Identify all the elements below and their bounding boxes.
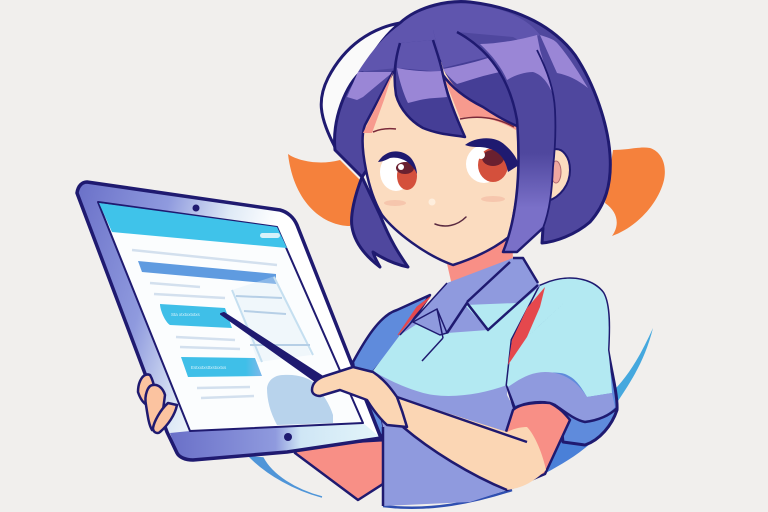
text lines	[132, 250, 277, 398]
blue arc right	[612, 328, 653, 404]
collar	[400, 258, 540, 361]
arm back pink	[295, 440, 386, 500]
forearm	[397, 397, 546, 490]
orange shape left	[288, 154, 360, 226]
front hair	[395, 30, 555, 252]
tablet	[77, 182, 381, 460]
tablet bottom bezel	[170, 423, 381, 460]
right lock	[457, 32, 555, 252]
glass reflection	[267, 375, 333, 425]
button two	[181, 357, 262, 377]
header pill	[260, 233, 280, 238]
section two line	[443, 75, 517, 126]
red strap left	[398, 297, 430, 335]
forehead shadow	[363, 72, 517, 133]
shirt outline	[382, 427, 384, 506]
lock outlines	[457, 32, 543, 252]
stylus	[221, 313, 323, 383]
nose	[428, 198, 436, 206]
blue arc bottom	[383, 490, 512, 508]
blush	[384, 200, 406, 206]
camera bottom	[284, 433, 292, 441]
hair back	[335, 2, 610, 243]
central bang	[395, 40, 465, 137]
hand	[312, 367, 407, 427]
back shoulder blue	[353, 295, 430, 440]
sleeve right	[507, 279, 617, 445]
orange shape right	[605, 147, 665, 236]
sleeve crease	[527, 302, 565, 337]
camera top	[192, 204, 200, 212]
button two: Estxxtxsttxstxxtxs	[191, 365, 227, 370]
right eye	[465, 138, 519, 183]
bar blue	[138, 261, 276, 284]
tablet screen	[98, 202, 363, 431]
button one: Sta xtxtxxtxtxs	[171, 312, 201, 317]
hair top lighter band	[358, 4, 540, 72]
neck	[445, 225, 513, 333]
left eye	[378, 151, 417, 191]
blue arc lower right	[540, 440, 595, 476]
button one	[160, 304, 232, 328]
eyebrows	[373, 117, 514, 132]
bang outline	[395, 40, 465, 137]
fingers left	[138, 374, 177, 433]
lower left hair lock	[352, 177, 408, 267]
shirt body	[373, 258, 540, 506]
blue arc left	[250, 457, 322, 497]
hair band white	[321, 23, 402, 147]
ear	[548, 149, 570, 201]
hair highlights	[347, 35, 588, 100]
shirt light upper	[373, 286, 540, 396]
screen header	[99, 203, 287, 248]
tablet frame	[77, 182, 381, 460]
section two	[433, 30, 517, 126]
mouth	[435, 217, 466, 226]
forearm outline	[397, 397, 527, 490]
tablet outline	[77, 182, 381, 460]
panel overlay	[232, 276, 311, 362]
red strap right	[508, 287, 545, 365]
face	[362, 60, 525, 265]
upper arm pink	[505, 403, 570, 490]
